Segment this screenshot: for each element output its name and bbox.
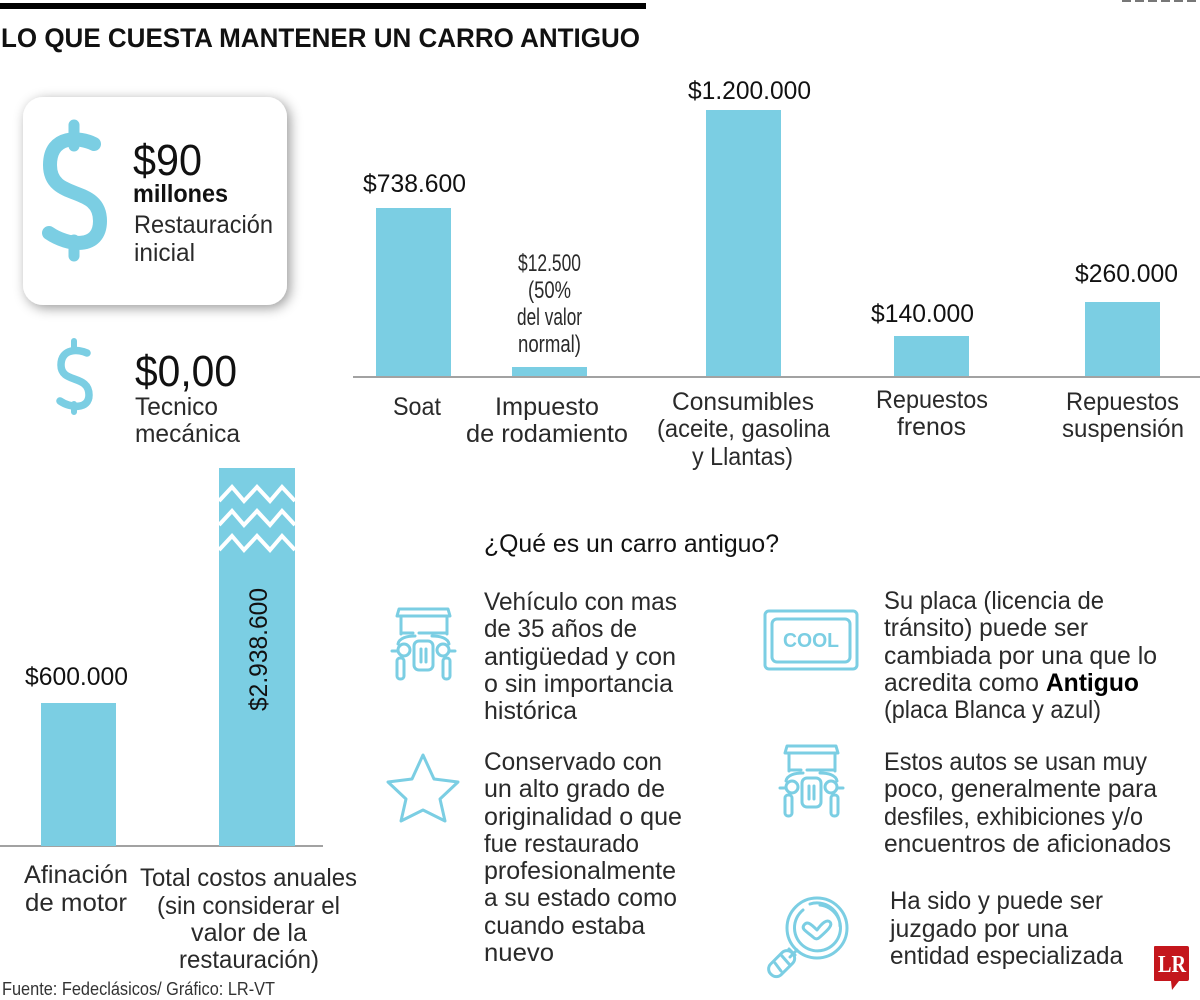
source: Fuente: Fedeclásicos/ Gráfico: LR-VT (2, 979, 275, 999)
icon: LR logo (1154, 946, 1189, 990)
icon: antique car (392, 609, 455, 679)
bar: Impuesto de rodamiento: normal) (518, 331, 581, 358)
text: encuentros de aficionados (884, 830, 1171, 858)
label: tecnico mecánica: Tecnico (135, 393, 218, 421)
item: conservado con alto grado (388, 748, 682, 967)
item: placa (765, 587, 1157, 724)
bar: Total costos anuales: $2.938.600 (245, 588, 273, 711)
bar: Afinación de motor: $600.000 (25, 663, 128, 691)
panel: técnico mecánica (60, 341, 240, 448)
bar: Repuestos frenos: Repuestos (876, 386, 988, 414)
bar: Consumibles: $1.200.000 (688, 77, 811, 105)
value: $90 millones: millones (133, 180, 228, 208)
item: juzgado (766, 887, 1123, 980)
text: profesionalmente (484, 857, 676, 885)
text: juzgado por una (889, 915, 1068, 943)
value: $90 millones: $90 (133, 136, 202, 185)
icon: small dollar sign (60, 341, 89, 412)
bar: Total costos anuales: (sin considerar el (157, 892, 340, 920)
text: Conservado con (484, 748, 662, 776)
bar: Soat: Soat (393, 393, 441, 421)
title: LO QUE CUESTA MANTENER UN CARRO ANTIGUO (1, 23, 640, 53)
text: cambiada por una que lo (884, 642, 1157, 670)
bar: Repuestos frenos: frenos (897, 413, 966, 441)
bar: Impuesto de rodamiento: (50% (528, 277, 571, 304)
bar: Impuesto de rodamiento: Impuesto (495, 393, 599, 421)
text: cuando estaba (484, 912, 645, 940)
label: restauración inicial: Restauración (134, 211, 273, 239)
bar: Impuesto de rodamiento: $12.500 (518, 250, 581, 277)
value: $0,00: $0,00 (135, 347, 237, 396)
bar: Soat: $738.600 (363, 170, 466, 198)
label: tecnico mecánica (135, 393, 240, 448)
text: o sin importancia (484, 670, 673, 698)
bar: Repuestos frenos (871, 300, 988, 441)
icon: large dollar sign (49, 125, 100, 256)
text: Ha sido y puede ser (890, 887, 1103, 915)
text: acredita como Antiguo (884, 669, 1139, 697)
item: estos autos (780, 746, 1171, 858)
bar: Total costos anuales (140, 468, 357, 974)
bar: Soat (363, 170, 466, 421)
bar: Consumibles (657, 77, 830, 471)
text: Su placa (licencia de (884, 587, 1104, 615)
panel: restauración inicial (23, 97, 287, 305)
text: un alto grado de (484, 775, 665, 803)
item: vehículo con mas de 35 años (392, 588, 677, 725)
text (484, 588, 677, 725)
bar: Repuestos suspensión: suspensión (1062, 415, 1184, 443)
label: restauración inicial: inicial (134, 239, 195, 267)
icon: magnifier with check (766, 898, 847, 980)
text: poco, generalmente para (884, 775, 1157, 803)
text: de 35 años de (484, 615, 637, 643)
bar: Afinación de motor: de motor (25, 889, 127, 917)
label: tecnico mecánica: mecánica (135, 420, 240, 448)
text: fue restaurado (484, 830, 639, 858)
icon: LR logo: LR (1158, 952, 1187, 978)
text: a su estado como (484, 884, 677, 912)
bar: Total costos anuales: valor de la (191, 919, 307, 947)
bar: Repuestos suspensión: $260.000 (1075, 260, 1178, 288)
icon: antique car (780, 746, 843, 816)
bar: Afinación de motor: Afinación (24, 861, 128, 889)
bar: Impuesto de rodamiento (466, 250, 628, 448)
text (884, 748, 1171, 858)
icon: COOL plate: COOL (783, 630, 839, 652)
heading: qué es un carro antiguo: ¿Qué es un carro antiguo? (484, 530, 779, 558)
bar: Repuestos suspensión: Repuestos (1066, 388, 1179, 416)
icon: COOL plate (765, 611, 857, 669)
text: tránsito) puede ser (884, 614, 1088, 642)
bar: Total costos anuales: restauración) (179, 946, 319, 974)
bar: Total costos anuales: Total costos anuales (140, 864, 357, 892)
text: (placa Blanca y azul) (884, 696, 1101, 724)
bar: Consumibles: (aceite, gasolina (657, 415, 830, 443)
bar: Repuestos frenos: $140.000 (871, 300, 974, 328)
bar chart: afinación and total (0, 468, 357, 974)
bar: Consumibles: Consumibles (672, 388, 814, 416)
value: $90 millones (133, 136, 228, 208)
text: originalidad o que (484, 803, 682, 831)
bar: Repuestos suspensión (1062, 260, 1184, 443)
text: Vehículo con mas (484, 588, 677, 616)
bar: Consumibles: y Llantas) (692, 443, 793, 471)
text (889, 887, 1123, 970)
bar: Impuesto de rodamiento: de rodamiento (466, 420, 628, 448)
bar chart: annual costs by item (353, 77, 1200, 471)
bar: Impuesto de rodamiento: del valor (517, 304, 582, 331)
text: histórica (484, 697, 577, 725)
text (884, 587, 1157, 724)
text: antigüedad y con (484, 643, 676, 671)
text (484, 748, 682, 967)
icon: star (388, 755, 458, 821)
text: entidad especializada (890, 942, 1123, 970)
text: Estos autos se usan muy (884, 748, 1147, 776)
text: nuevo (484, 939, 554, 967)
bar: Afinación de motor (24, 663, 128, 917)
label: restauración inicial (134, 211, 273, 267)
text: desfiles, exhibiciones y/o (884, 803, 1143, 831)
